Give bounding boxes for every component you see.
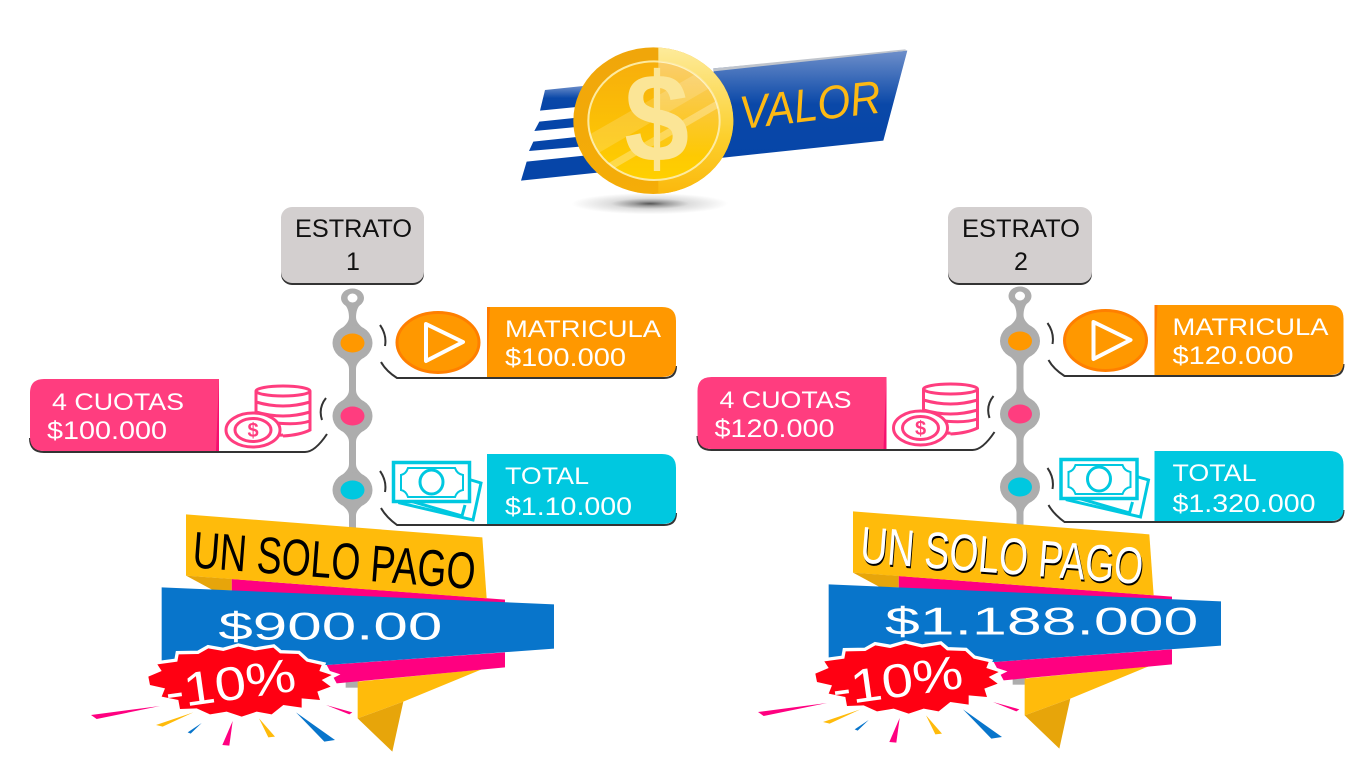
card: total: TOTAL — [1172, 460, 1256, 487]
discount burst — [148, 647, 332, 720]
card: matricula — [1048, 305, 1344, 376]
gold coin — [573, 47, 735, 195]
price: $900.00 — [218, 604, 442, 648]
timeline — [1000, 286, 1040, 530]
heading: un solo pago — [858, 515, 1146, 597]
card: 4 cuotas — [698, 377, 994, 450]
card: 4 cuotas: $120.000 — [714, 415, 834, 443]
burst rays — [91, 705, 352, 746]
card: total — [1048, 451, 1344, 522]
column: estrato 1 — [30, 207, 676, 752]
icon: coins — [894, 384, 978, 445]
icon: play — [397, 312, 479, 372]
timeline — [332, 288, 372, 532]
estrato 2 header box: ESTRATO — [962, 215, 1080, 243]
heading: un solo pago: UN SOLO PAGO — [191, 520, 478, 600]
discount burst: -10% — [828, 646, 966, 717]
promo banner: un solo pago — [91, 514, 554, 752]
estrato 2 header box: 2 — [1014, 248, 1028, 276]
card: total: TOTAL — [505, 463, 589, 490]
icon: coins — [226, 386, 310, 447]
card: matricula: $120.000 — [1172, 342, 1294, 370]
discount burst — [815, 644, 999, 717]
card: 4 cuotas: 4 CUOTAS — [720, 387, 852, 414]
VALOR label: VALOR — [737, 71, 884, 139]
column: estrato 2 — [698, 207, 1344, 749]
estrato 1 header box — [281, 207, 424, 285]
card: matricula: MATRICULA — [505, 316, 661, 343]
card: matricula: MATRICULA — [1172, 314, 1328, 341]
banner ribbons — [162, 514, 554, 752]
card: total — [380, 454, 676, 525]
burst rays — [758, 702, 1019, 743]
icon: coins: $ — [247, 420, 259, 442]
card: 4 cuotas: 4 CUOTAS — [52, 389, 184, 416]
header logo: VALOR coin — [521, 47, 907, 214]
heading: un solo pago: UN SOLO PAGO — [859, 518, 1146, 597]
card: total: $1.320.000 — [1172, 490, 1316, 518]
promo banner: un solo pago — [758, 511, 1221, 749]
estrato 2 header box — [948, 207, 1092, 285]
estrato 1 header box: 1 — [346, 248, 360, 276]
dollar sign: $ — [624, 48, 689, 189]
card: matricula: $100.000 — [505, 344, 626, 372]
coin shadow — [572, 193, 728, 214]
icon: banknotes — [394, 462, 481, 520]
icon: coins: $ — [915, 418, 926, 440]
card: 4 cuotas: $100.000 — [47, 417, 167, 445]
heading: un solo pago: UN SOLO PAGO — [858, 515, 1145, 595]
icon: play — [1064, 310, 1146, 370]
discount burst: -10% — [161, 649, 299, 720]
banner ribbons — [829, 511, 1221, 749]
card: matricula — [380, 307, 676, 378]
price: $1.188.000 — [885, 599, 1198, 643]
estrato 1 header box: ESTRATO — [295, 215, 412, 243]
card: 4 cuotas — [30, 379, 327, 452]
icon: banknotes — [1061, 460, 1148, 517]
card: total: $1.10.000 — [505, 493, 632, 521]
blue ribbon — [521, 49, 907, 181]
